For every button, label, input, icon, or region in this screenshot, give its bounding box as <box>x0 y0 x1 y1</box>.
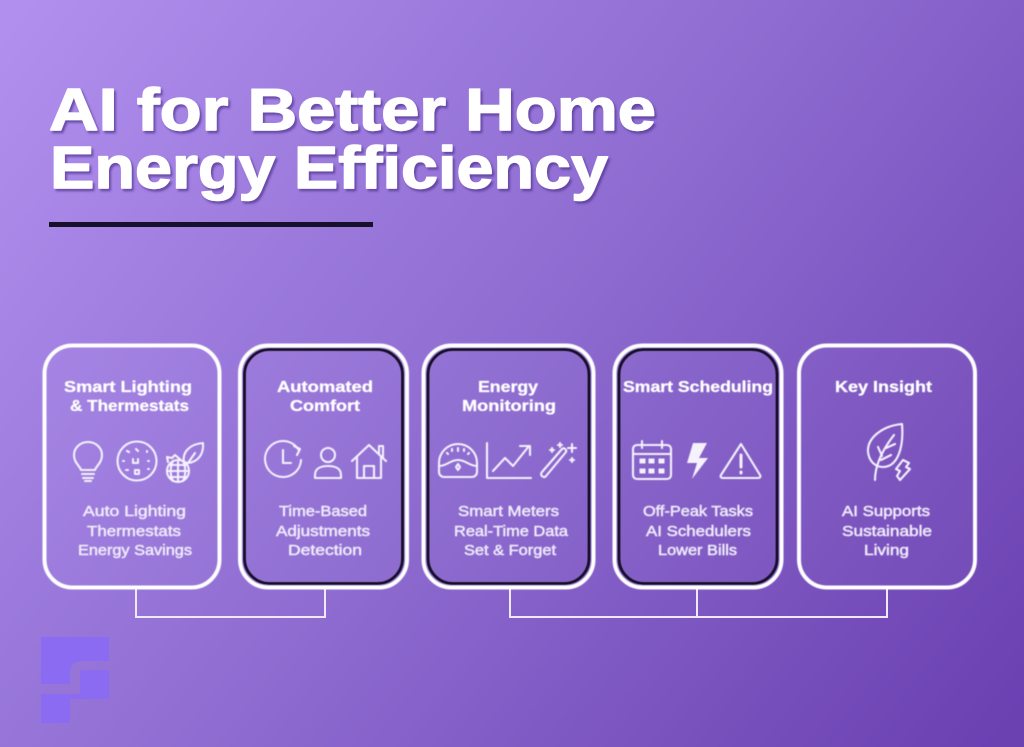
panel: energy monitoring: Smart Meters <box>458 504 559 520</box>
panel: smart lighting and thermostats: Energy Savings <box>78 543 192 559</box>
panel: smart scheduling <box>614 346 782 588</box>
title: AI for Better Home <box>49 77 656 143</box>
panel: automated comfort <box>240 346 407 588</box>
icon: clock <box>265 441 301 477</box>
icon: light bulb <box>74 442 102 481</box>
panel: automated comfort: Time-Based <box>279 504 367 520</box>
panel: energy monitoring <box>424 346 594 588</box>
title underline <box>49 222 373 227</box>
icon: leaf with bolt <box>868 424 910 480</box>
panel: smart scheduling: Lower Bills <box>658 543 737 559</box>
panel: smart scheduling: Smart Scheduling <box>623 379 773 396</box>
panel: energy monitoring: Monitoring <box>462 398 556 415</box>
panel: smart scheduling: Off-Peak Tasks <box>643 504 753 520</box>
icon: house <box>352 445 386 478</box>
icon: lightning bolt <box>687 443 708 479</box>
panel: energy monitoring: Real-Time Data <box>454 524 569 540</box>
panel: key insight: Key Insight <box>835 379 932 396</box>
panel: smart scheduling: AI Schedulers <box>646 524 751 540</box>
panel: key insight: Sustainable <box>842 524 932 540</box>
icon: globe with leaf <box>167 443 203 482</box>
panel: energy monitoring: Set & Forget <box>464 543 556 559</box>
icon: magic wand <box>541 443 576 477</box>
panel: smart lighting and thermostats <box>44 346 220 588</box>
panel: automated comfort: Detection <box>288 543 362 559</box>
panel: automated comfort: Automated <box>277 379 373 396</box>
panel: smart lighting and thermostats: Auto Lighting <box>83 504 186 520</box>
panel: automated comfort: Adjustments <box>276 524 370 540</box>
icon: growth chart <box>487 443 531 478</box>
panel: energy monitoring: Energy <box>478 379 538 396</box>
panel: automated comfort: Comfort <box>290 398 360 415</box>
logo <box>41 637 109 723</box>
panel: key insight: Living <box>864 543 909 559</box>
icon: warning triangle <box>721 444 760 478</box>
panel: key insight <box>799 346 975 588</box>
panel: smart lighting and thermostats: Thermestats <box>87 524 181 540</box>
panel: smart lighting and thermostats: Smart Lighting <box>64 379 192 396</box>
icon: thermostat dial <box>118 442 156 480</box>
icon: calendar <box>633 441 671 479</box>
title: Energy Efficiency <box>50 135 608 201</box>
connector: cards 1 and 2 <box>136 589 325 617</box>
icon: person <box>315 448 341 478</box>
icon: gauge <box>439 444 477 477</box>
panel: key insight: AI Supports <box>842 504 930 520</box>
title <box>49 77 656 201</box>
panel: smart lighting and thermostats: & Thermestats <box>70 398 189 415</box>
connector: cards 3, 4 and 5 <box>510 589 887 617</box>
